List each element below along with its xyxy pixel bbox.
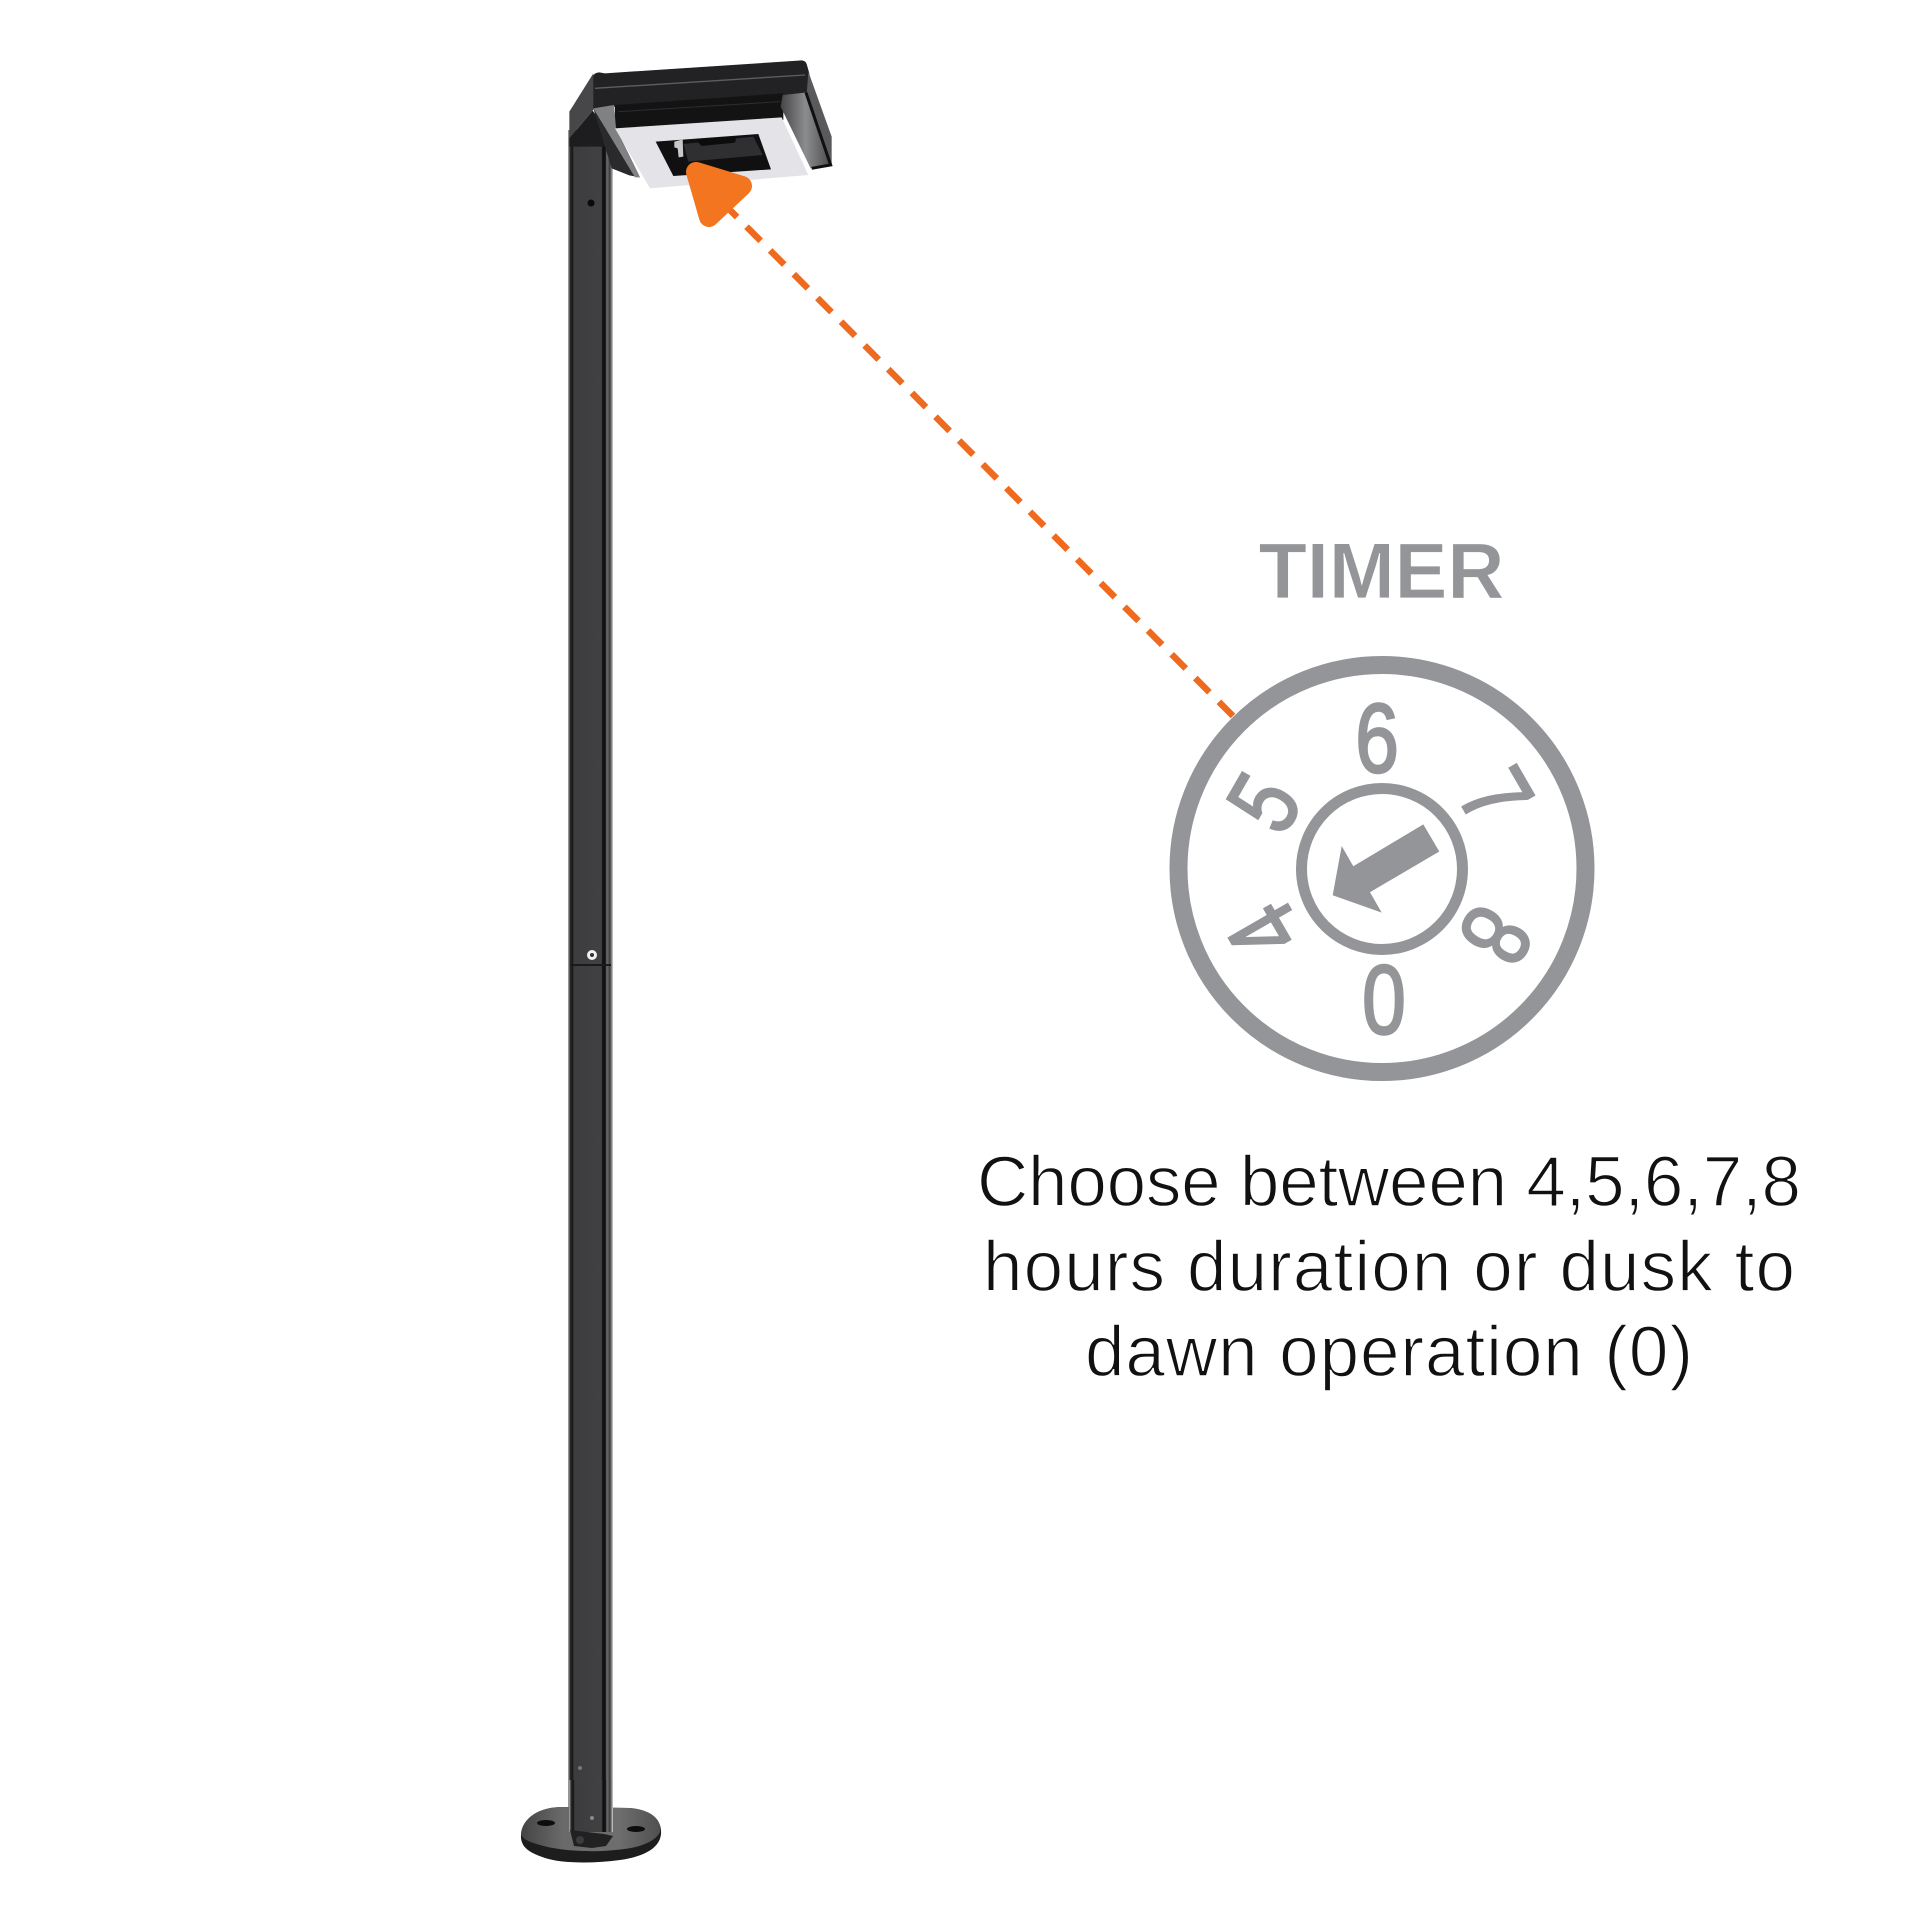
- timer description: dawn operation (0): [1085, 1313, 1693, 1392]
- dial numbers: 0: [1362, 945, 1406, 1054]
- fixture head: [569, 60, 832, 188]
- dial numbers: 6: [1355, 684, 1399, 793]
- timer description: hours duration or dusk to: [983, 1228, 1795, 1307]
- left bracket: [593, 105, 640, 177]
- timer dial: [1178, 665, 1586, 1072]
- timer heading: TIMER: [1259, 526, 1504, 615]
- recess under head: [615, 93, 783, 129]
- pole: [568, 130, 613, 1830]
- timer description: [977, 1143, 1801, 1392]
- dial numbers: 5: [1206, 756, 1322, 849]
- top band: [593, 60, 809, 108]
- dial pointer arrow: [1333, 824, 1439, 913]
- dial numbers: 8: [1438, 889, 1554, 982]
- timer description: Choose between 4,5,6,7,8: [977, 1143, 1801, 1222]
- plate window: [656, 134, 771, 176]
- white plate: [615, 117, 808, 188]
- bollard light fixture: [521, 60, 832, 1862]
- orange arrowhead: [696, 172, 742, 217]
- dial numbers: [1206, 684, 1554, 1054]
- dial numbers: 4: [1206, 885, 1322, 978]
- round base plate: [521, 1780, 661, 1862]
- inner ring: [1302, 788, 1462, 950]
- right bracket: [781, 93, 831, 168]
- left side of head: [569, 73, 596, 138]
- silver switch: [674, 139, 683, 157]
- right side of head: [807, 72, 832, 165]
- dashed orange leader line: [726, 206, 1233, 716]
- outer ring: [1178, 665, 1586, 1072]
- pole top: [569, 111, 612, 147]
- dial numbers: 7: [1438, 750, 1554, 843]
